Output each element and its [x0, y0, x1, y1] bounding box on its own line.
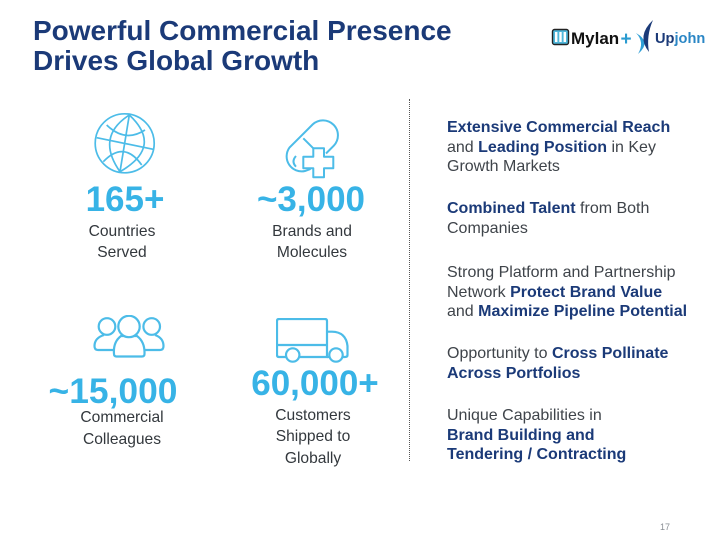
label: Countries Served — [89, 223, 155, 261]
title: Powerful Commercial Presence — [33, 15, 452, 46]
stat: ~15,000: ~15,000 — [49, 371, 177, 411]
label: Brands and Molecules: Molecules — [277, 244, 347, 261]
text: reach: and Leading Position in Key — [447, 139, 656, 156]
label: Customers Shipped to Globally: Shipped to — [276, 428, 350, 445]
label: Brands and Molecules — [272, 223, 352, 261]
title — [33, 15, 452, 76]
text: platform: and Maximize Pipeline Potential — [447, 303, 687, 320]
text: cross pollinate: Across Portfolios — [447, 365, 580, 382]
text: reach — [447, 119, 670, 175]
stat: ~3,000: ~3,000 — [257, 180, 365, 219]
label: Commercial Colleagues: Commercial — [80, 409, 164, 426]
text: talent — [447, 200, 649, 237]
logo: Mylan + Upjohn: Upjohn — [655, 31, 705, 47]
stat: 165+: 165+ — [86, 180, 164, 219]
text: talent: Combined Talent from Both — [447, 200, 649, 217]
label: Countries Served: Countries — [89, 223, 155, 240]
text: reach: Growth Markets — [447, 158, 560, 175]
page number: 17 — [660, 522, 670, 532]
text: capabilities: Unique Capabilities in — [447, 407, 602, 424]
label: Commercial Colleagues — [80, 409, 164, 448]
label: Customers Shipped to Globally: Customers — [275, 407, 351, 424]
logo: Mylan + Upjohn — [552, 20, 705, 54]
logo: Mylan + Upjohn: Mylan — [571, 29, 619, 48]
text: capabilities: Brand Building and — [447, 427, 595, 444]
stat: 60,000+: 60,000+ — [251, 364, 379, 403]
label: Brands and Molecules: Brands and — [272, 223, 352, 240]
text: platform: Network Protect Brand Value — [447, 284, 662, 301]
text: platform — [447, 264, 687, 320]
label: Commercial Colleagues: Colleagues — [83, 431, 161, 448]
label: Countries Served: Served — [97, 244, 147, 261]
divider — [409, 99, 410, 461]
logo: Mylan + Upjohn: + — [620, 29, 632, 50]
icon: delivery truck — [276, 318, 349, 363]
text: cross pollinate: Opportunity to Cross Pollinate — [447, 345, 668, 362]
text: platform: Strong Platform and Partnership — [447, 264, 676, 281]
label: Customers Shipped to Globally: Globally — [285, 450, 341, 467]
text: talent: Companies — [447, 220, 528, 237]
text: capabilities: Tendering / Contracting — [447, 446, 626, 463]
text: reach: Extensive Commercial Reach — [447, 119, 670, 136]
icon: people — [93, 315, 165, 358]
text: cross pollinate — [447, 345, 668, 382]
label: Customers Shipped to Globally — [275, 407, 351, 467]
icon: pill and cross — [286, 119, 339, 178]
text: capabilities — [447, 407, 626, 463]
icon: globe — [94, 113, 156, 174]
title: Drives Global Growth — [33, 45, 319, 76]
